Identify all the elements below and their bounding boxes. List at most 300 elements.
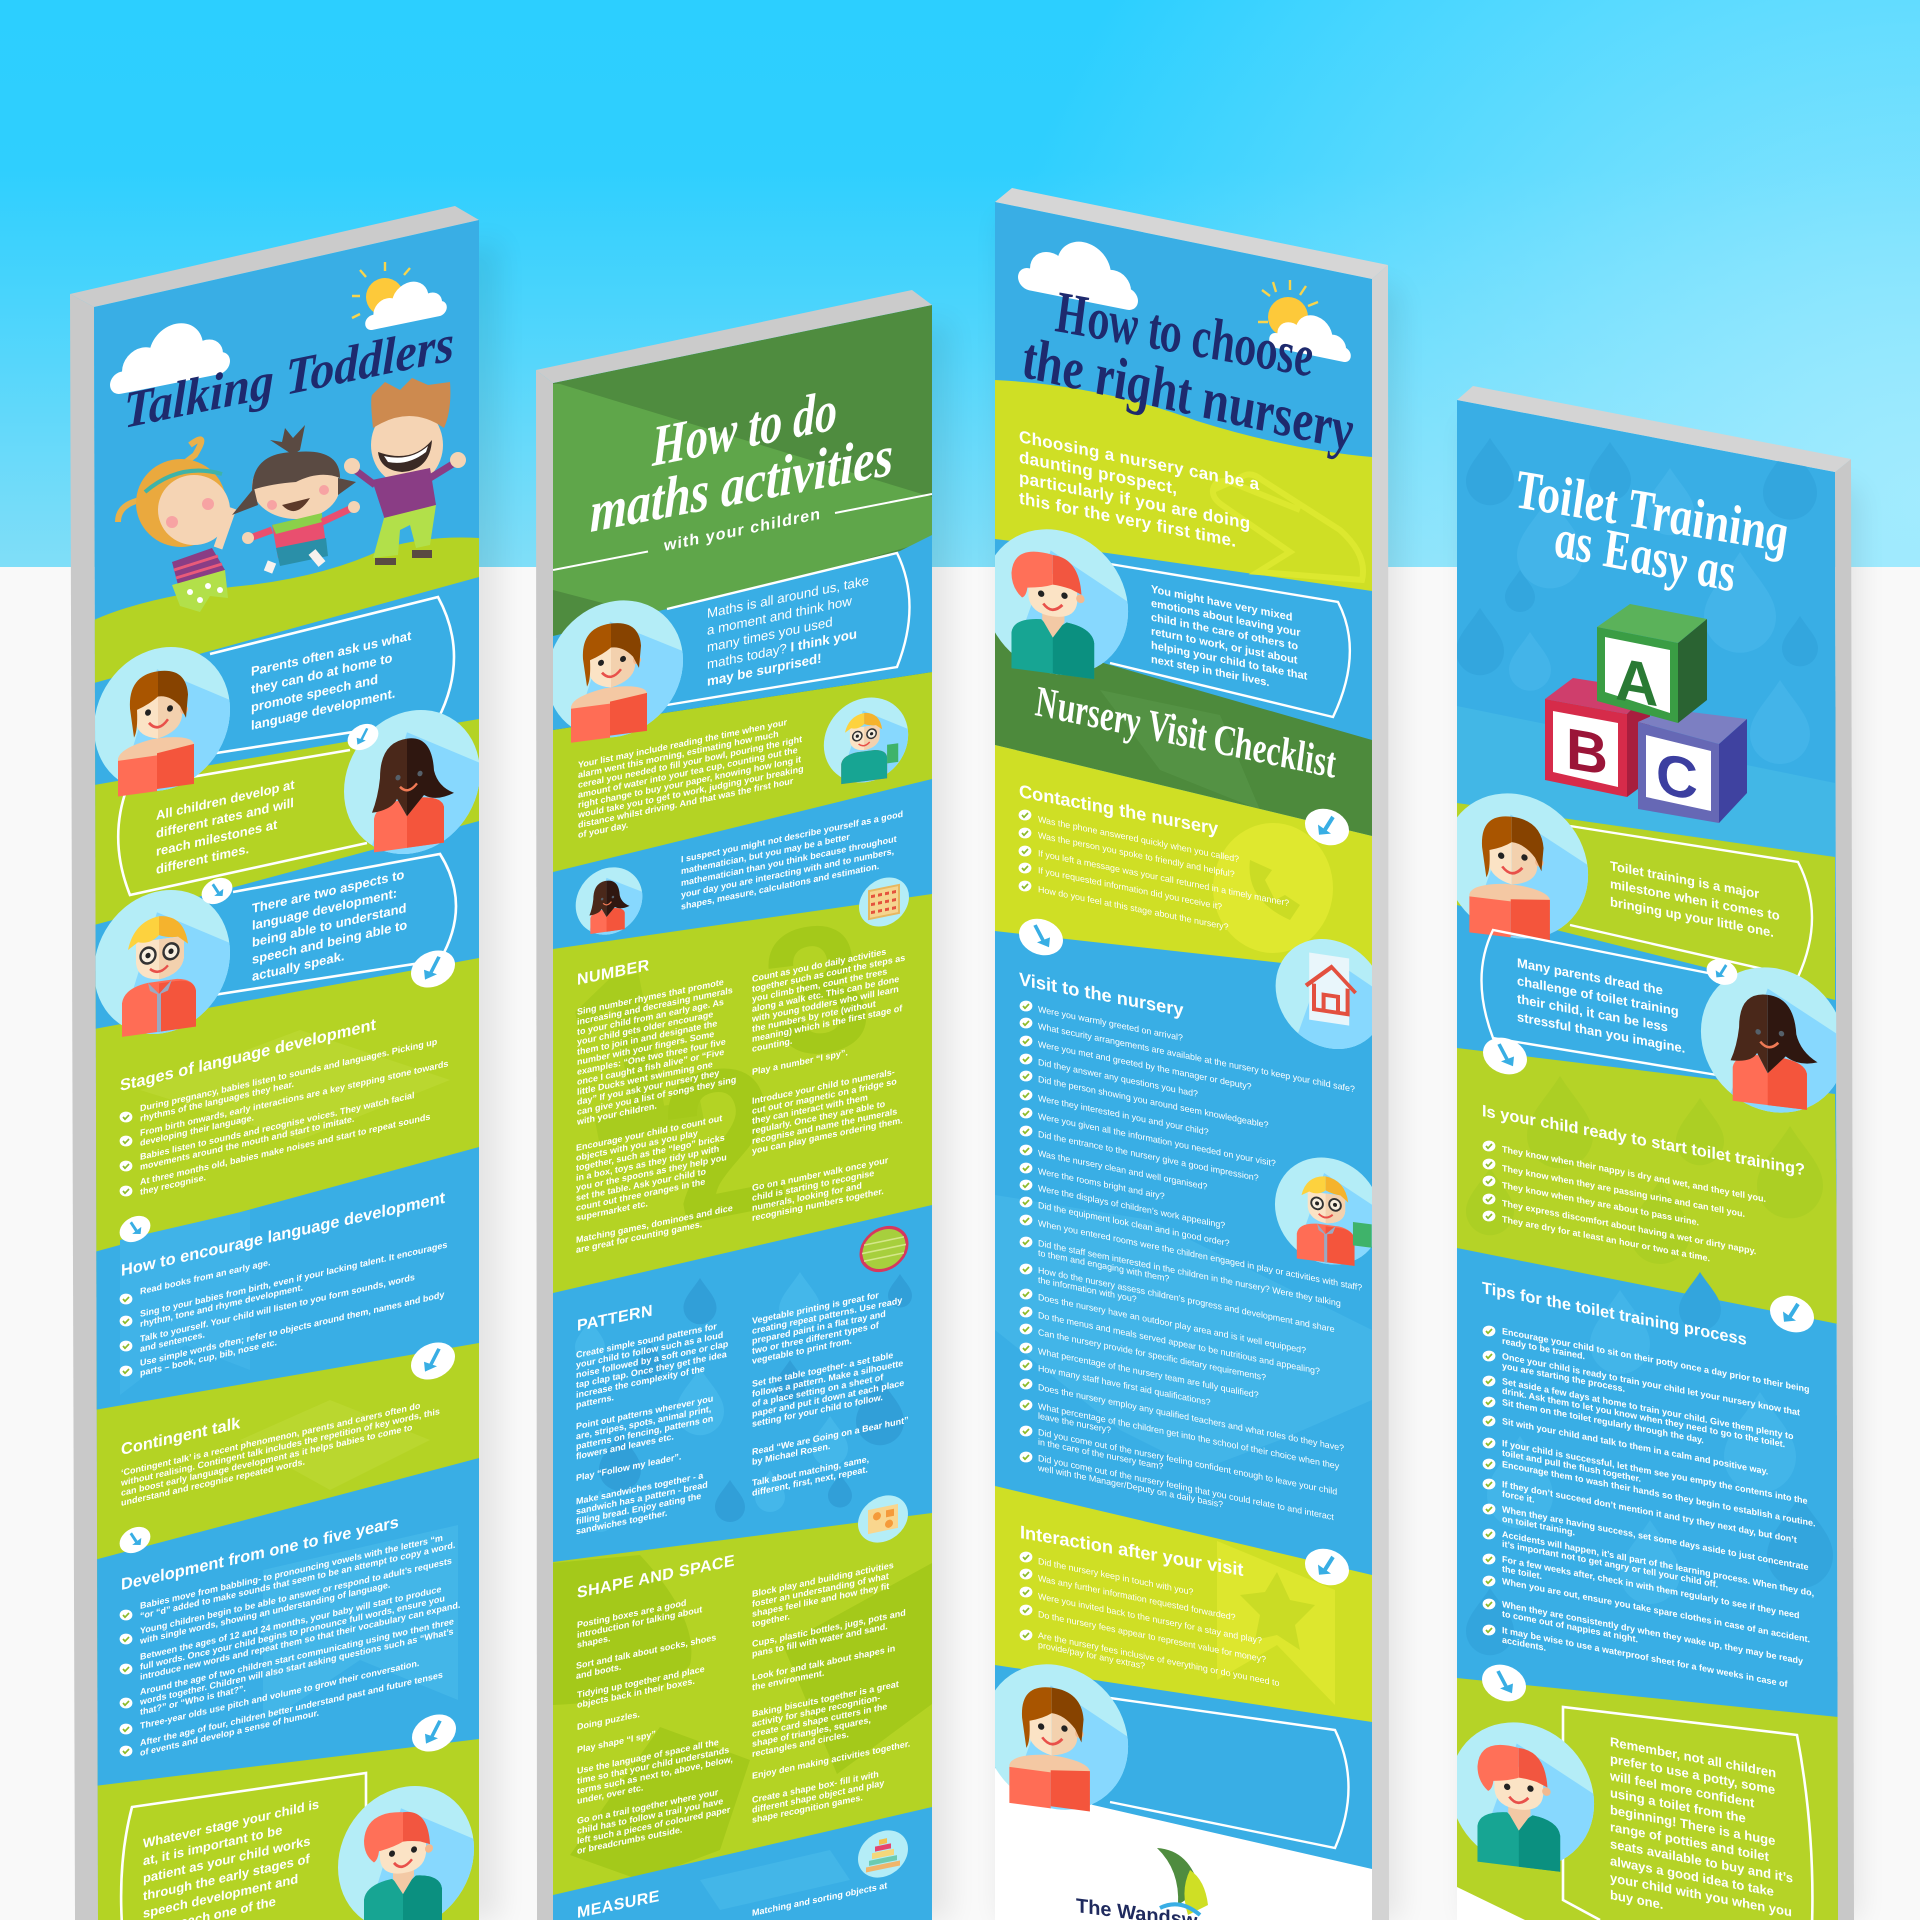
text: your list may include: right change to buy your paper, knowing how long it (578, 754, 801, 810)
arrow badges (120, 721, 456, 1755)
section: shape and space: objects back in their boxes. (577, 1676, 695, 1710)
section: development from one to five years: Young children begin to be able to answer or respond to adult’s requests (140, 1556, 452, 1636)
text: your list may include: cereal you needed to fill your bowl, pouring the right (578, 734, 802, 790)
panel: How to do maths activities (536, 290, 950, 1920)
section: shape and space: left such a pieces of coloured paper (577, 1804, 731, 1846)
section: visit to the nursery: How many staff have first aid qualifications? (1038, 1363, 1211, 1408)
section: pattern: your child to follow such as a loud (576, 1330, 723, 1370)
callout: two aspects: speech and being able to (252, 917, 407, 967)
closing callout: remember: seats available to buy and it’s (1610, 1836, 1793, 1886)
callout: mixed emotions: emotions about leaving your (1151, 598, 1301, 640)
closing callout: whatever stage: speech development and (143, 1871, 298, 1920)
decorative light drops (1509, 468, 1810, 764)
section: visit to the nursery: Does the nursery employ any qualified teachers and what roles do they have? (1038, 1382, 1344, 1453)
section: development from one to five years: Between the ages of 12 and 24 months, your baby will start to produce (140, 1584, 441, 1662)
section: shape and space: Block play and building activities (752, 1560, 894, 1599)
section: visit to the nursery: Was the nursery clean and well organised? (1038, 1148, 1207, 1192)
section: shape and space (576, 1552, 910, 1856)
section: tips for the toilet training process: the toilet. (1502, 1564, 1542, 1581)
section: number (576, 943, 905, 1255)
icon: phone watermark (1213, 823, 1333, 953)
decorative numerals: 3 (749, 882, 886, 1098)
avatar: dark hair woman (1701, 959, 1847, 1123)
section: how to encourage language development: and sentences. (140, 1329, 205, 1354)
section: shape and space: Play shape “I spy” (577, 1729, 656, 1755)
text: I suspect: mathematician than you think because throughout (681, 834, 897, 888)
intro text: this for the very first time. (1019, 488, 1236, 551)
callout: two aspects: being able to understand (252, 900, 406, 950)
section: pattern: sandwich has a pattern - bread (576, 1479, 708, 1516)
section: visit to the nursery: well with the Manager/Deputy on a daily basis? (1037, 1462, 1223, 1510)
section: contacting the nursery: How do you feel at this stage about the nursery? (1038, 884, 1229, 932)
panel artwork (984, 202, 1386, 1920)
section: number: with your children. (576, 1101, 657, 1127)
section: stages of language development: movements around the mouth and start to imitate. (140, 1114, 354, 1172)
callout: all children develop (118, 750, 367, 895)
section: measure (577, 1880, 887, 1920)
callout: major milestone: Toilet training is a major (1610, 858, 1759, 901)
avatar: red hair woman (984, 520, 1130, 686)
section: interaction after your visit: Are the nursery fees inclusive of everything or do you need to (1038, 1630, 1279, 1688)
section: visit to the nursery: Did you come out of the nursery feeling that you could relate to and interact (1038, 1453, 1334, 1522)
icon: hand watermark (1213, 474, 1363, 580)
section: stages of language development: Babies listen to sounds and recognise voices. They watch facial (140, 1090, 414, 1162)
callout: major milestone: milestone when it comes to (1610, 876, 1780, 923)
section: number: once I caught a fish alive” or “Five (577, 1047, 724, 1087)
avatar: brown hair woman (547, 592, 685, 748)
icon: clouds (110, 274, 447, 396)
section: how to encourage language development (120, 1188, 447, 1378)
section: visit to the nursery: in the care of the nursery team? (1038, 1437, 1163, 1472)
section: shape and space: shapes. (577, 1633, 610, 1650)
section: development from one to five years: introduce new words and repeat them so that their vocabulary can expand. (140, 1600, 460, 1682)
section: how to encourage language development: Read books from an early age. (140, 1257, 270, 1296)
section: interaction after your visit: Interaction after your visit (1020, 1521, 1243, 1580)
text: I suspect: I suspect you might not describe yourself as a good (681, 809, 903, 864)
section: shape and space: different shape object and play (752, 1778, 884, 1815)
title: How to choose (1054, 278, 1313, 391)
section: number: the numbers by rote (without (752, 999, 876, 1034)
section: visit to the nursery: the information with you? (1038, 1275, 1137, 1304)
section: number: in a box, toys as they tidy up with (576, 1144, 719, 1183)
closing callout: remember: always a good idea to take (1610, 1853, 1774, 1899)
section: tips for the toilet training process: Encourage them to wash their hands so they begin to establish a routine. (1502, 1459, 1815, 1529)
block: B: B (1566, 716, 1608, 788)
callout: major milestone: bringing up your little one. (1610, 894, 1774, 940)
panel: Toilet Training as Easy as ABC (1444, 386, 1860, 1920)
section: visit to the nursery: What percentage of the children get into the school of their choice when they (1038, 1401, 1340, 1471)
section: development from one to five years (120, 1512, 460, 1758)
section: development from one to five years: full words. Once your child begins to pronounce full words, ensure you (140, 1593, 445, 1672)
avatar: dark hair woman (344, 710, 479, 854)
text: your list may include: amount of water into your tea cup, counting out the (578, 745, 798, 800)
title (1023, 278, 1354, 465)
section: shape and space: Create a shape box- fill it with (752, 1769, 879, 1805)
section: number: Matching games, dominoes and dice (576, 1203, 733, 1245)
section: stages of language development: Stages of language development (120, 1015, 376, 1095)
section: is your child ready: They know when they are about to pass urine. (1502, 1180, 1699, 1227)
section: number: you can play games ordering them. (752, 1115, 903, 1156)
text: I suspect: mathematician, but you may be a better (681, 832, 850, 876)
decorative numerals (576, 926, 866, 1224)
section: pattern: Create simple sound patterns for (576, 1321, 717, 1360)
text: I suspect: your day you are interacting with and to numbers, (681, 846, 894, 900)
callout: mixed emotions: You might have very mixed (1151, 584, 1293, 624)
title: Toilet Training (1515, 458, 1788, 565)
section: pattern: creating repeat patterns. Use ready (752, 1295, 902, 1336)
section: tips for the toilet training process: drink. Ask them to let you know when they need to go to the toilet. (1502, 1386, 1785, 1449)
section: number: together such as count the steps as (752, 953, 905, 994)
section: number: Count as you do daily activities (752, 946, 886, 984)
callout: parents often ask: Parents often ask us what (251, 628, 412, 679)
decorative numerals: 1 (545, 916, 720, 1193)
section: number: recognising numbers together. (752, 1186, 884, 1223)
arrow badges (1019, 806, 1349, 1588)
closing callout: remember: using a toilet from the (1610, 1785, 1746, 1826)
arrow badges (1482, 957, 1814, 1705)
section: development from one to five years: words together. Children will also start asking questions such as “What’s (139, 1626, 454, 1707)
section: tips for the toilet training process: If your child is successful, let them see you empty the contents into the (1502, 1438, 1807, 1506)
section: contacting the nursery: Was the phone answered quickly when you called? (1038, 814, 1239, 864)
closing callout: remember: will feel more confident (1609, 1768, 1755, 1811)
section: tips for the toilet training process: to come out of nappies at night. (1502, 1609, 1638, 1644)
section: visit to the nursery: leave the nursery? (1038, 1411, 1111, 1435)
section: pattern: follows a pattern. Make a silhouette (752, 1358, 903, 1399)
block: C (1638, 709, 1747, 823)
book edge: grey spine and top (536, 290, 932, 1920)
decorative blue drops (1487, 1290, 1796, 1604)
panel artwork (94, 220, 482, 1920)
section: pattern: Play “Follow my leader”. (576, 1451, 681, 1483)
title: How to do (651, 378, 837, 479)
callout: mixed emotions: next step in their lives. (1151, 654, 1269, 689)
section: contacting the nursery: Was the person you spoke to friendly and helpful? (1038, 830, 1235, 879)
title (1515, 458, 1788, 605)
section: visit to the nursery: Did you come out of the nursery feeling confident enough to leave your child (1038, 1427, 1337, 1497)
section: is your child ready (1482, 1101, 1805, 1274)
section: visit to the nursery: When you entered rooms were the children engaged in play or activities with staff? (1038, 1218, 1362, 1293)
section: pattern (576, 1285, 909, 1536)
title: with your children (663, 505, 820, 555)
callout: two aspects (207, 854, 456, 996)
section: number: them to join in and designate the (577, 1018, 717, 1057)
section: shape and space: and boots. (576, 1662, 621, 1681)
avatar: brown hair woman (95, 647, 230, 796)
section: pattern: different, first, next, repeat. (752, 1464, 868, 1498)
section: visit to the nursery: Did the equipment look clean and in good order? (1038, 1200, 1230, 1248)
section: pattern: PATTERN (577, 1302, 653, 1335)
section: number: Introduce your child to numerals- (752, 1067, 895, 1106)
callout: many parents dread: Many parents dread the (1517, 955, 1663, 998)
decorative numerals: 2 (644, 1016, 803, 1269)
section: pattern: patterns. (576, 1392, 614, 1410)
section: pattern: increase the complexity of the (576, 1364, 705, 1400)
section: shape and space: foster an understanding of what (752, 1571, 889, 1609)
book edge: grey spine and top (70, 206, 479, 1920)
section: contingent talk: can boost early language development as it helps babies to come to (121, 1422, 413, 1498)
section: tips for the toilet training process: it’s important not to get angry or tell your child off. (1502, 1539, 1718, 1590)
section: pattern: tap clap tap. Once they get the idea (576, 1349, 728, 1390)
section: shape and space: Use the language of space all the (577, 1737, 719, 1776)
section: interaction after your visit: Was any further information requested forwarded? (1038, 1573, 1236, 1623)
title: Talking Toddlers (124, 315, 454, 440)
icon: house (1276, 931, 1386, 1058)
section: contacting the nursery: Contacting the nursery (1019, 780, 1219, 839)
closing callout: remember: Remember, not all children (1610, 1734, 1776, 1781)
section: number: Go on a number walk once your (752, 1155, 889, 1193)
avatar: brown hair woman (984, 1655, 1130, 1821)
section: how to encourage language development: Talk to yourself. Your child will listen to you form sounds, words (140, 1272, 415, 1344)
section: visit to the nursery: Visit to the nursery (1019, 968, 1184, 1020)
section: number: little Ducks went swimming one (577, 1059, 713, 1097)
section: tips for the toilet training process: Once your child is ready to train your child let your nursery know that (1502, 1351, 1800, 1418)
section: development from one to five years: Development from one to five years (121, 1512, 399, 1594)
section: number: supermarket etc. (576, 1198, 648, 1223)
callout: many parents dread: challenge of toilet training (1517, 973, 1679, 1019)
text: your list may include: alarm went this morning, estimating how much (578, 729, 779, 780)
section: visit to the nursery: Did the staff seem interested in the children in the nursery? Were they talking (1038, 1238, 1341, 1309)
section: contacting the nursery: If you left a message was your call returned in a timely manner? (1038, 848, 1289, 908)
section: number: you or the spoons as they help you (576, 1152, 727, 1193)
section: development from one to five years: “or “d” added to make sounds that seem to be an attempt to copy a word. (140, 1540, 455, 1621)
section: stages of language development: At three months old, babies make noises and start to repeat sounds (140, 1111, 430, 1187)
avatar: boy with glasses (96, 890, 230, 1037)
section: visit to the nursery: Were the displays of children’s work appealing? (1038, 1183, 1225, 1230)
section: pattern: setting for your child to follow. (752, 1392, 883, 1429)
section: tips for the toilet training process: you are starting the process. (1502, 1361, 1625, 1394)
closing callout: remember: prefer to use a potty, some (1610, 1751, 1775, 1797)
illustration: three children (118, 378, 466, 612)
section: tips for the toilet training process: Sit them on the toilet regularly through the day. (1502, 1397, 1704, 1445)
section: number: your child gets older encourage (577, 1009, 713, 1047)
section: tips for the toilet training process: Sit with your child and talk to them in a calm and positive way. (1502, 1416, 1768, 1477)
callout: many parents dread: their child, it can be less (1517, 991, 1668, 1035)
icon: stacking rings (858, 1826, 908, 1882)
section: pattern: Vegetable printing is great for (752, 1290, 879, 1326)
avatar: red hair woman (1450, 1714, 1596, 1878)
section: visit to the nursery: What percentage of the nursery team are fully qualified? (1038, 1346, 1259, 1400)
section: interaction after your visit: provide/pay for any extras? (1038, 1640, 1145, 1671)
section: shape and space: the environment. (752, 1668, 824, 1692)
section: shape and space: activity for shape recognition- (752, 1693, 880, 1729)
callout: mixed emotions: return to work, or just about (1151, 626, 1298, 667)
section: how to encourage language development: Use simple words often; refer to objects around them, names and body (140, 1289, 445, 1368)
decorative darker blue drops (1466, 1272, 1833, 1655)
section: shape and space: Tidying up together and place (577, 1664, 705, 1700)
section: stages of language development: developing their language. (140, 1112, 254, 1148)
section: number: child is starting to recognise (752, 1168, 874, 1203)
block: A: A (1615, 644, 1658, 719)
section: shape and space: pans to fill with water and sand. (752, 1621, 888, 1659)
section: tips for the toilet training process: toilet and pull the flush together. (1502, 1448, 1641, 1484)
section: tips for the toilet training process: It may be wise to use a waterproof sheet for a few weeks in case of (1502, 1625, 1788, 1689)
section: shape and space: shape of triangles, squares, (752, 1715, 871, 1749)
callout: all children develop: different times. (156, 841, 249, 877)
block: B (1545, 678, 1650, 797)
section: number: Play a number “I spy”. (752, 1047, 848, 1077)
section: pattern: filling bread. Enjoy eating the (576, 1491, 701, 1526)
title (553, 378, 932, 570)
callout: many parents dread: stressful than you imagine. (1517, 1009, 1685, 1056)
section: shape and space: Posting boxes are a good (577, 1598, 686, 1630)
section: visit to the nursery: Were you given all the information you needed on your visit? (1038, 1111, 1276, 1169)
section: visit to the nursery: Were you warmly greeted on arrival? (1038, 1004, 1183, 1043)
closing callout: whatever stage: Whatever stage your child is (143, 1796, 319, 1851)
section: pattern: by Michael Rosen. (752, 1441, 830, 1467)
section: tips for the toilet training process: For a few weeks after, check in with them regularly to see if they need (1502, 1554, 1800, 1621)
section: interaction after your visit (1020, 1521, 1279, 1698)
section: visit to the nursery: Does the nursery have an outdoor play area and is it well equipped? (1038, 1292, 1306, 1356)
section: contingent talk: ‘Contingent talk’ is a recent phenomenon, parents and carers often do (121, 1400, 421, 1478)
decorative green drops (1466, 1076, 1823, 1264)
section: tips for the toilet training process: If they don’t succeed don’t mention it and try they next day, but don’t (1502, 1479, 1797, 1545)
section: pattern: sandwiches together. (576, 1508, 667, 1536)
section: stages of language development: rhythms of the languages they hear. (140, 1079, 294, 1123)
section: number: Sing number rhymes that promote (577, 977, 724, 1017)
section: interaction after your visit: Do the nursery fees appear to represent value for money? (1038, 1609, 1266, 1665)
section: pattern: Set the table together- a set table (752, 1350, 893, 1389)
callout: maths is all around us: Maths is all around us, take (707, 573, 869, 621)
callout: parents often ask: language development. (251, 686, 395, 733)
callout: parents often ask: promote speech and (251, 671, 378, 715)
section: shape and space: Go on a trail together where your (577, 1787, 719, 1826)
section: visit to the nursery (1019, 968, 1362, 1537)
section: shape and space: time so that your child understands (577, 1745, 729, 1786)
section: shape and space: or breadcrumbs outside. (577, 1824, 682, 1856)
section: pattern: are, stripes, spots, animal print, (576, 1404, 711, 1441)
icon: shape tray (858, 1491, 908, 1547)
section: shape and space: Sort and talk about socks, shoes (576, 1632, 716, 1671)
avatar: boy with book (1275, 1151, 1383, 1273)
section: pattern: noise followed by a soft one or clap (576, 1339, 729, 1380)
section: number: set the table. Ask your child to (576, 1166, 706, 1203)
section: measure: Matching and sorting objects at (752, 1880, 887, 1918)
closing callout: remember (1563, 1707, 1812, 1920)
section: contacting the nursery (1019, 780, 1289, 944)
callout: all children develop: reach milestones at (156, 817, 278, 859)
section: number: objects with you as you play (576, 1128, 698, 1163)
avatar: brown hair woman (1444, 785, 1590, 949)
section: contingent talk: understand and recognise repeated words. (121, 1457, 305, 1508)
section: number: regularly. Once they are able to (752, 1099, 886, 1136)
section: stages of language development: During pregnancy, babies listen to sounds and languages. Picking up (140, 1036, 438, 1113)
section: contingent talk: Contingent talk (121, 1413, 241, 1459)
section: number: Encourage your child to count out (576, 1113, 722, 1153)
section: is your child ready: They know when their nappy is dry and wet, and they tell you. (1502, 1144, 1766, 1204)
decorative shapes in shape band (553, 1555, 932, 1880)
intro text: daunting prospect, (1019, 447, 1177, 498)
closing callout: remember: your child with you when you (1610, 1870, 1792, 1920)
section: development from one to five years: that?” or “Who is that?”. (140, 1683, 246, 1717)
section: number: day” If you ask your nursery they (577, 1068, 719, 1107)
section: pattern: Make sandwiches together - a (576, 1470, 704, 1506)
decorative dark drops (1456, 438, 1818, 675)
logo: The Wandsworth (1076, 1848, 1208, 1920)
avatar: boy with book (824, 692, 909, 789)
closing callout: whatever stage: at, it is important to be (143, 1822, 282, 1868)
section: tips for the toilet training process: Tips for the toilet training process (1482, 1278, 1747, 1349)
callout: major milestone (1570, 826, 1812, 977)
section: number: they can interact with them (752, 1092, 868, 1126)
section: number: examples: “One two three four five (577, 1036, 726, 1077)
section: pattern: Point out patterns wherever you (576, 1393, 713, 1431)
section: development from one to five years: Three-year olds use pitch and volume to grow their conversation. (140, 1658, 419, 1731)
section: is your child ready: They know when they are passing urine and can tell you. (1502, 1163, 1745, 1219)
section: visit to the nursery: Were they interested in you and your child? (1038, 1093, 1209, 1137)
section: number: counting. (752, 1036, 792, 1054)
block: C: C (1656, 741, 1698, 813)
text: your list may include: would take you to get to work, judging your breaking (577, 764, 804, 820)
callout: parents often ask: they can do at home to (251, 650, 392, 697)
section: number: are great for counting games. (576, 1219, 702, 1255)
avatar: dark hair woman (576, 863, 643, 940)
section: shape and space: Enjoy den making activities together. (752, 1738, 910, 1781)
section: number: cut out or magnetic on a fridge so (752, 1076, 897, 1116)
section: visit to the nursery: Were the rooms bright and airy? (1038, 1166, 1165, 1201)
section: tips for the toilet training process: on toilet training. (1502, 1514, 1575, 1537)
section: pattern: paper and put it down at each place (752, 1378, 904, 1419)
title: as Easy as (1555, 507, 1735, 605)
section: visit to the nursery: to them and engaging with them? (1038, 1248, 1169, 1284)
title: the right nursery (1023, 325, 1354, 465)
section: tips for the toilet training process: Encourage your child to sit on their potty once a day prior to their being (1502, 1326, 1809, 1394)
section: tips for the toilet training process: Set aside a few days at home to train your child. Give them plenty to (1502, 1376, 1794, 1441)
panel artwork (1444, 400, 1847, 1920)
section: tips for the toilet training process: force it. (1502, 1489, 1535, 1505)
section: shape and space: create card shape cutters in the (752, 1701, 887, 1739)
book edge: grey side and top (995, 188, 1389, 1920)
icon: melon print (861, 1223, 907, 1275)
callout: mixed emotions: child in the care of others to (1151, 612, 1298, 653)
decorative light drops (575, 1272, 848, 1532)
icon: bookmark star watermark (1217, 1541, 1335, 1705)
section: pattern: patterns on fencing, patterns on (576, 1413, 713, 1451)
illustration: ABC blocks (1545, 604, 1747, 823)
section: pattern: flowers and leaves etc. (576, 1431, 674, 1461)
section: shape and space: Cups, plastic bottles, jugs, pots and (752, 1607, 906, 1649)
section: how to encourage language development: parts – book, cup, bib, nose etc. (140, 1337, 277, 1378)
icon: abacus (859, 873, 909, 931)
callout: maths is all around us: a moment and think how (707, 593, 852, 638)
text: your list may include: Your list may include reading the time when your (578, 717, 787, 770)
text: I suspect: shapes, measure, calculations and estimation. (681, 861, 879, 912)
panel: How to choose the right nursery (984, 188, 1400, 1920)
callout: two aspects: There are two aspects to (252, 867, 404, 916)
section: development from one to five years: Babies move from babbling- to pronouncing vowels with the letters “m (140, 1533, 443, 1611)
callout: all children develop: All children develop at (156, 777, 295, 823)
closing callout: remember: range of potties and toilet (1610, 1819, 1769, 1864)
closing callout: whatever stage: patient as your child works (143, 1833, 310, 1886)
section: visit to the nursery: What security arrangements are available at the nursery to keep your child safe? (1038, 1021, 1355, 1094)
section: number: count out three oranges in the (576, 1176, 705, 1213)
section: visit to the nursery: Do the menus and meals served appear to be nutritious and appealing? (1038, 1310, 1320, 1376)
closing callout: remember: beginning! There is a huge (1610, 1802, 1775, 1848)
avatar: red hair woman (338, 1777, 476, 1920)
section: stages of language development: From birth onwards, early interactions are a key stepping stone towards (140, 1058, 448, 1138)
section: visit to the nursery: Did the person showing you around seem knowledgeable? (1038, 1074, 1269, 1130)
title: maths activities (590, 423, 893, 545)
section: interaction after your visit: Were you invited back to the nursery for a stay and play? (1038, 1591, 1262, 1646)
callout: mixed emotions: helping your child to take that (1151, 640, 1308, 683)
callout outline: empty frame (1110, 1698, 1348, 1848)
section: number: together, such as the “lego” bricks (576, 1132, 725, 1173)
callout: many parents dread (1482, 930, 1723, 1076)
section: number: to your child from an early age. As (577, 997, 724, 1037)
section: shape and space: SHAPE AND SPACE (577, 1552, 735, 1602)
section: number: numerals, looking for and (752, 1180, 862, 1213)
section: visit to the nursery: Can the nursery provide for specific dietary requirements? (1038, 1327, 1266, 1383)
section: is your child ready: They express discomfort about having a wet or dirty nappy. (1502, 1198, 1756, 1256)
